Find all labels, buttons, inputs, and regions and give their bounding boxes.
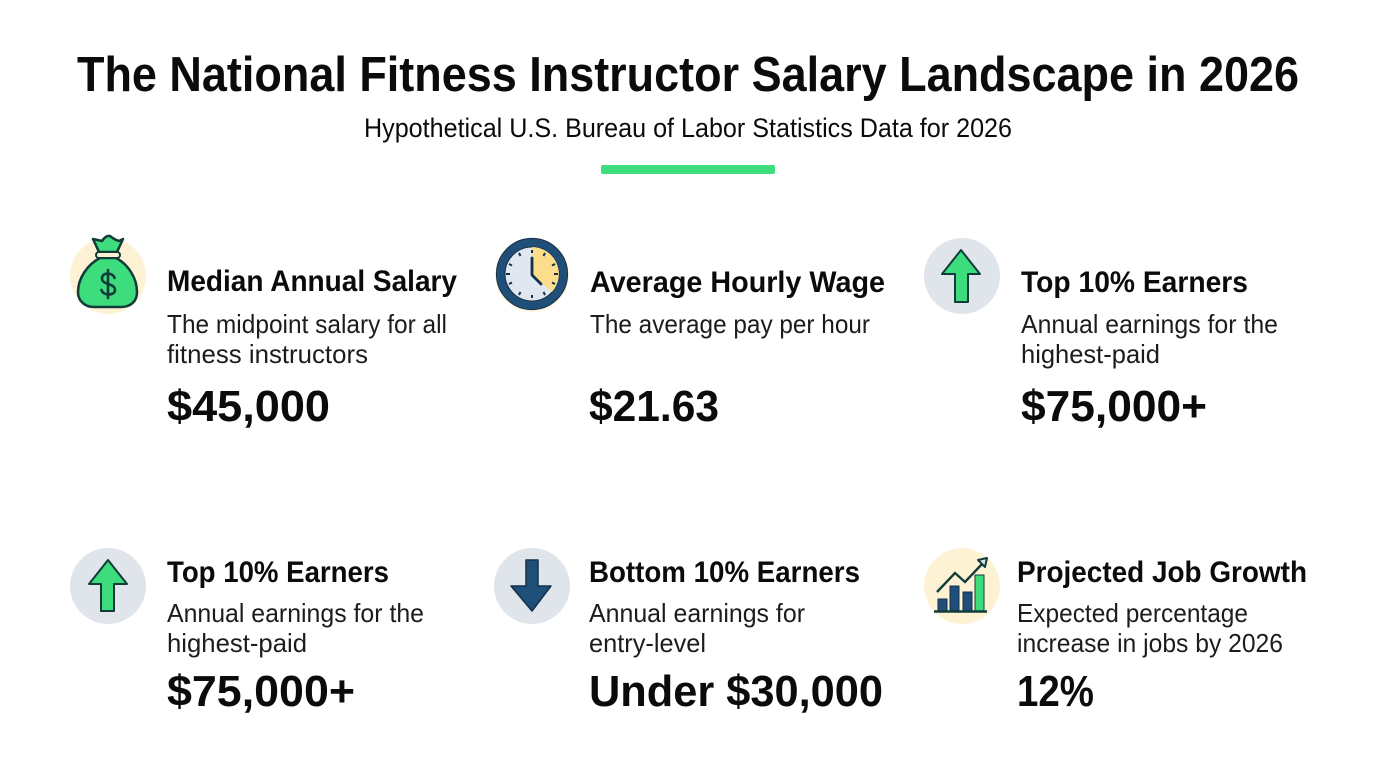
icon: money bag [70,236,146,314]
description: increase in jobs by 2026 [1017,628,1283,658]
description: Annual earnings for the [167,598,424,628]
description: highest-paid [167,628,307,658]
description: The average pay per hour [590,309,870,339]
title: The National Fitness Instructor Salary Landscape in 2026 [77,48,1299,102]
description [167,309,447,369]
icon: up arrow [70,548,146,624]
heading: Bottom 10% Earners [589,556,860,589]
icon: down arrow [494,548,570,624]
value: Under $30,000 [589,667,883,716]
heading: Median Annual Salary [167,265,457,298]
description [1021,309,1278,369]
value: 12% [1017,667,1094,716]
green accent bar [601,165,775,174]
value: $75,000+ [1021,382,1207,431]
subtitle: Hypothetical U.S. Bureau of Labor Statistics Data for 2026 [364,113,1012,143]
icon: clock [495,238,569,312]
panel: top 10% earners (row two) [70,548,424,716]
heading: Average Hourly Wage [590,266,885,299]
description [1017,598,1283,658]
value: $75,000+ [167,667,355,716]
icon: growth chart [924,548,1000,624]
value: $21.63 [589,382,719,431]
panel: bottom 10% earners [494,548,883,716]
heading: Top 10% Earners [1021,266,1248,299]
heading: Top 10% Earners [167,556,389,589]
description: Expected percentage [1017,598,1248,628]
description: entry-level [589,628,706,658]
description: The midpoint salary for all [167,309,447,339]
heading: Projected Job Growth [1017,556,1307,589]
value: $45,000 [167,382,330,431]
panel: average hourly wage [495,238,885,431]
description: fitness instructors [167,339,368,369]
description: highest-paid [1021,339,1160,369]
panel: projected job growth [924,548,1307,716]
description [589,598,805,658]
icon: up arrow [924,238,1000,314]
description [167,598,424,658]
panel: top 10% earners (row one) [924,238,1278,431]
description: Annual earnings for [589,598,805,628]
panel: median annual salary [70,236,457,431]
description: Annual earnings for the [1021,309,1278,339]
